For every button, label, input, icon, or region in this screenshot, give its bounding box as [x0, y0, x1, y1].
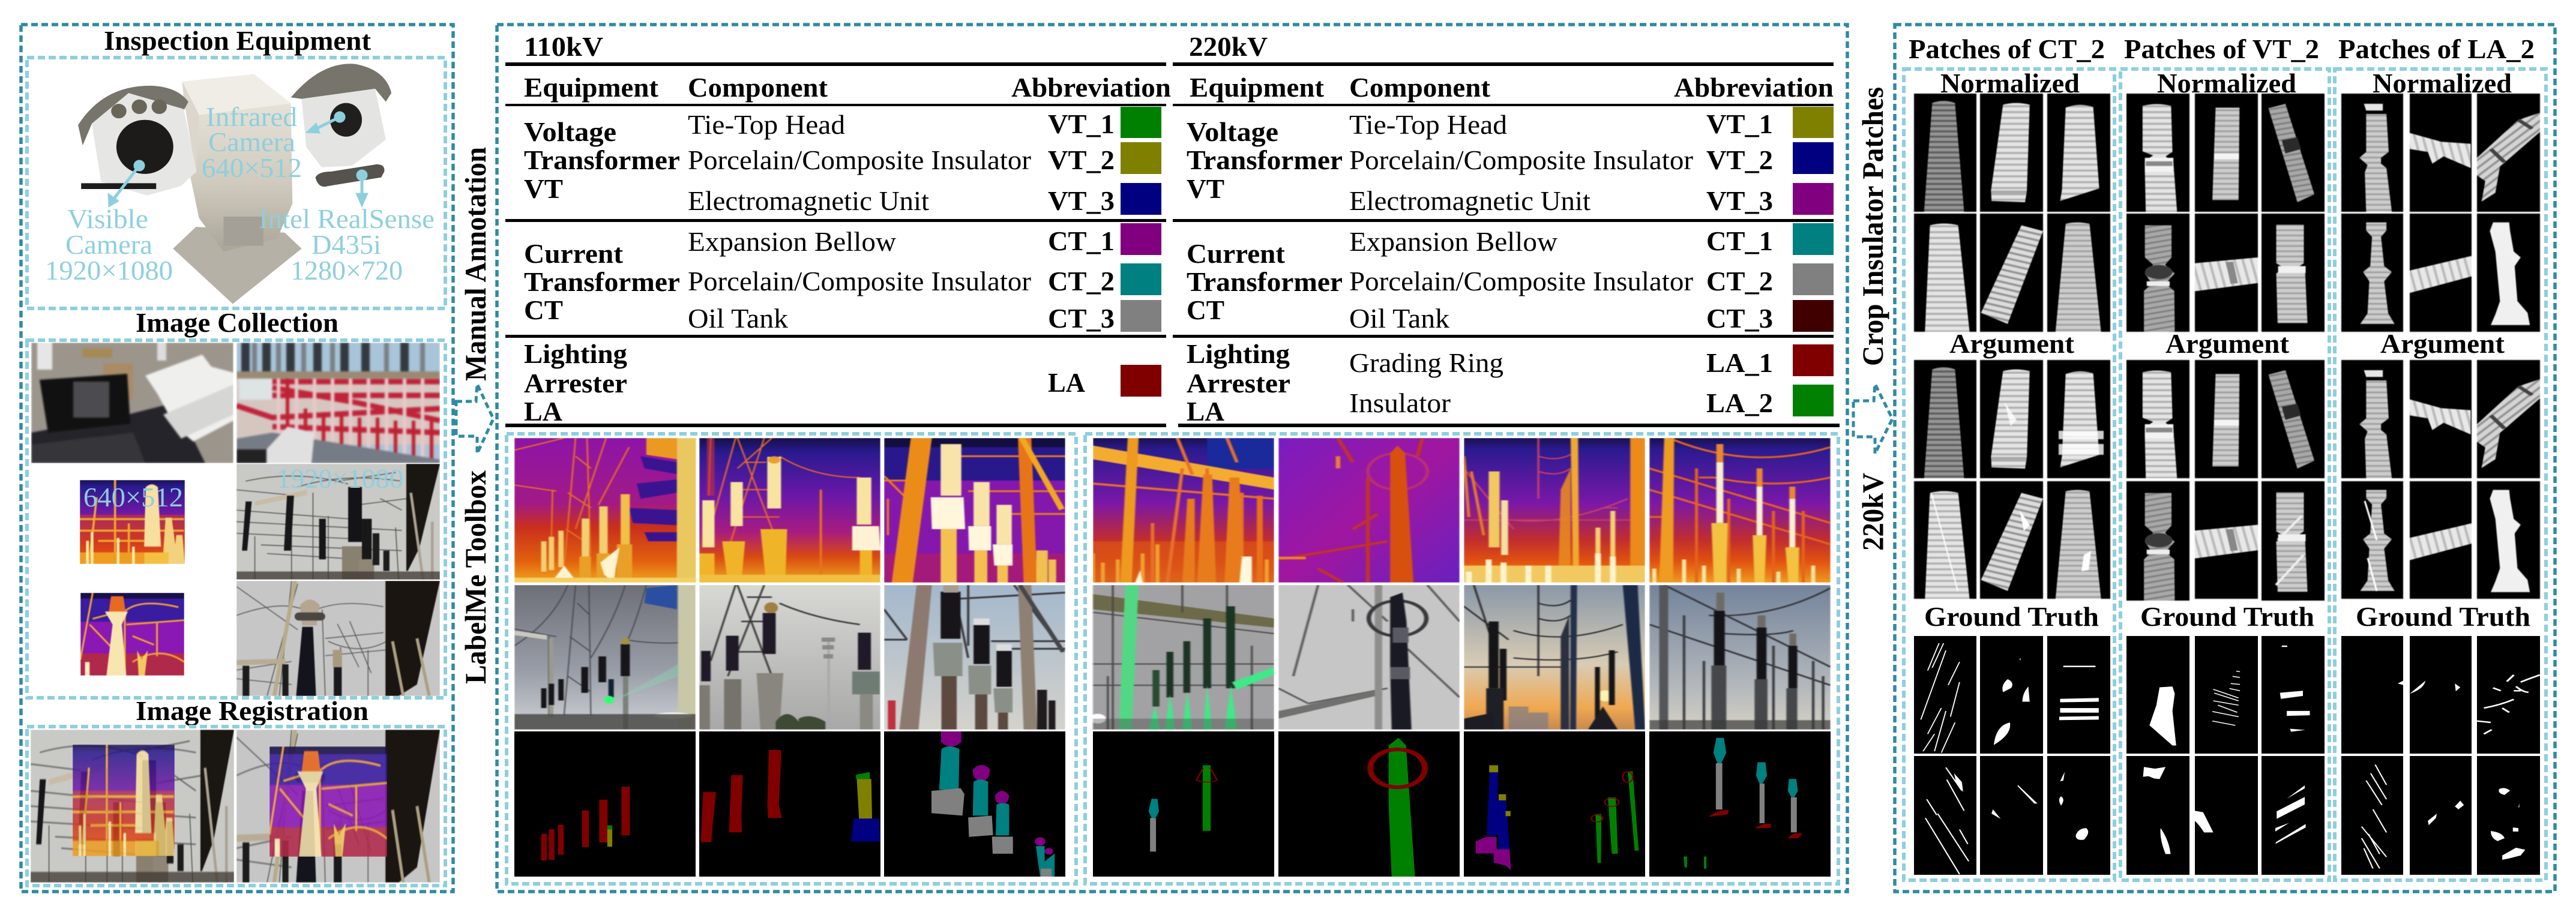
panel: 220kV image grid: [1085, 434, 1838, 884]
arrow: realsense pointer: [356, 170, 368, 207]
table: 220kV legend: Insulator: [1349, 388, 1451, 418]
label: Crop Insulator Patches: Crop Insulator Patches: [1856, 87, 1889, 366]
patches: CT_2 argument: [1914, 360, 2110, 599]
label: infrared camera: Camera: [208, 127, 295, 157]
patches: VT_2 ground truth: [2126, 636, 2325, 875]
panel: center manual annotation: [497, 25, 1847, 892]
label: Manual Annotation: Manual Annotation: [459, 147, 492, 381]
table: 220kV legend: Porcelain/Composite Insulator: [1349, 266, 1693, 296]
heading: Patches of VT_2: Patches of VT_2: [2124, 34, 2319, 64]
photo: thermal image 640x512: [80, 480, 185, 564]
table: 110kV legend: Transformer: [524, 145, 680, 175]
photo: 220kV thermal 1: [1093, 438, 1274, 583]
label: 220kV: 220kV: [1856, 473, 1889, 551]
panel: LA_2 patches: [2335, 68, 2546, 880]
table: 110kV legend: Tie-Top Head: [688, 109, 845, 140]
table: 220kV legend: Tie-Top Head: [1349, 109, 1507, 140]
photo: 220kV thermal 4: [1649, 438, 1831, 583]
table: 110kV legend: LA: [1048, 367, 1085, 398]
table: 110kV legend: [505, 31, 1171, 427]
table: 110kV legend: Abbreviation: [1011, 72, 1171, 103]
patches: VT_2 argument: [2126, 360, 2325, 601]
patches: LA_2 argument: [2341, 360, 2541, 599]
table: 220kV legend: VT: [1187, 173, 1224, 204]
table: 220kV legend: 220kV: [1189, 31, 1268, 62]
table: 220kV legend: Transformer: [1187, 266, 1343, 297]
panel: LA_2 patches: Argument: [2380, 328, 2505, 359]
panel: LA_2 patches: Ground Truth: [2356, 601, 2530, 632]
panel: VT_2 patches: [2120, 68, 2329, 880]
icon: pan tilt inspection camera: [78, 64, 391, 304]
label: intel realsense: D435i: [311, 229, 381, 260]
table: 110kV legend: VT_1: [1048, 109, 1115, 139]
arrow: infrared camera pointer: [306, 112, 345, 133]
table: 220kV legend: LA: [1187, 396, 1224, 427]
table: 220kV legend: CT: [1187, 295, 1224, 325]
table: 110kV legend: Transformer: [524, 266, 680, 297]
label: intel realsense: Intel RealSense: [259, 203, 435, 234]
table: 110kV legend: Equipment: [524, 72, 659, 103]
table: 220kV legend: Lighting: [1187, 338, 1290, 369]
panel: CT_2 patches: Argument: [1949, 328, 2075, 359]
photo: 110kV thermal 3: [884, 438, 1065, 583]
panel: camera rig: [27, 58, 445, 308]
photo: visible substation wide: [236, 464, 440, 580]
label: infrared camera: Infrared: [206, 101, 297, 132]
table: 220kV legend: VT_1: [1706, 109, 1773, 139]
photo: 110kV visible 3: [884, 585, 1065, 730]
heading: Patches of CT_2: Patches of CT_2: [1909, 34, 2105, 64]
table: 110kV legend: VT_3: [1048, 185, 1115, 216]
table: 220kV legend: Transformer: [1187, 145, 1343, 175]
label: visible resolution: 1920×1080: [277, 463, 403, 494]
patches: CT_2 normalized: [1914, 94, 2110, 332]
photo: visible substation close: [236, 581, 440, 696]
photo: 220kV mask 3: [1464, 731, 1645, 877]
table: 110kV legend: Oil Tank: [688, 303, 788, 334]
table: 220kV legend: VT_2: [1706, 145, 1773, 175]
table: 110kV legend: VT: [524, 173, 563, 204]
table: 110kV legend: Porcelain/Composite Insulator: [688, 266, 1031, 296]
label: intel realsense: [259, 203, 435, 286]
panel: VT_2 patches: Normalized: [2157, 68, 2296, 98]
table: 220kV legend: Grading Ring: [1349, 347, 1503, 378]
label: intel realsense: 1280×720: [290, 255, 403, 286]
table: 220kV legend: Oil Tank: [1349, 303, 1449, 334]
table: 220kV legend: Abbreviation: [1674, 72, 1834, 103]
photo: 220kV visible 3: [1464, 585, 1645, 730]
arrow: visible camera pointer: [108, 160, 145, 207]
photo: laptop and camera on site: [31, 343, 233, 463]
photo: 220kV visible 4: [1649, 585, 1831, 730]
table: 110kV legend: Voltage: [524, 116, 616, 147]
table: 110kV legend: Porcelain/Composite Insulator: [688, 145, 1031, 175]
photo: 220kV mask 2: [1278, 731, 1460, 877]
label: visible camera: [45, 203, 173, 286]
photo: thermal image close: [80, 593, 184, 676]
photo: 220kV visible 2: [1278, 585, 1460, 730]
label: LabelMe Toolbox: LabelMe Toolbox: [459, 470, 492, 684]
panel: right, crop insulator patches: [1895, 25, 2555, 892]
photo: 110kV thermal 2: [699, 438, 880, 583]
table: 110kV legend: Current: [524, 238, 624, 269]
patches: CT_2 ground truth: [1914, 636, 2110, 875]
heading: Image Collection: Image Collection: [136, 307, 339, 338]
table: 220kV legend: LA_2: [1706, 388, 1773, 418]
panel: CT_2 patches: Normalized: [1940, 68, 2080, 98]
table: 110kV legend: LA: [524, 396, 562, 427]
photo: registered overlay left: [31, 730, 234, 883]
photo: 110kV mask 1: [514, 731, 696, 877]
photo: 220kV thermal 3: [1464, 438, 1645, 583]
table: 220kV legend: Arrester: [1187, 368, 1290, 398]
table: 220kV legend: LA_1: [1706, 347, 1773, 378]
photo: 110kV visible 1: [514, 585, 696, 730]
photo: barrier at substation: [236, 343, 440, 463]
table: 220kV legend: Expansion Bellow: [1349, 226, 1558, 257]
heading: Patches of LA_2: Patches of LA_2: [2338, 34, 2535, 64]
table: 220kV legend: Electromagnetic Unit: [1349, 185, 1590, 216]
label: visible camera: Camera: [65, 229, 152, 260]
photo: 220kV mask 4: [1649, 731, 1831, 877]
heading: Inspection Equipment: Inspection Equipment: [104, 25, 372, 56]
photo: 220kV visible 1: [1092, 585, 1274, 730]
photo: 110kV visible 2: [699, 585, 880, 730]
panel: 110kV image grid: [507, 434, 1076, 884]
panel: left column, inspection equipment, collection and registration: [21, 25, 453, 892]
table: 110kV legend: CT: [524, 295, 563, 325]
panel: VT_2 patches: Ground Truth: [2140, 601, 2314, 632]
table: 220kV legend: Current: [1187, 238, 1286, 269]
patches: VT_2 normalized: [2126, 94, 2325, 332]
arrow: left panel to annotation panel: [456, 384, 493, 454]
patches: LA_2 ground truth: [2341, 636, 2540, 875]
table: 220kV legend: Voltage: [1187, 116, 1278, 147]
label: thermal resolution: 640×512: [83, 482, 183, 512]
label: infrared camera: [202, 101, 302, 183]
table: 110kV legend: Lighting: [524, 338, 627, 369]
table: 110kV legend: 110kV: [524, 31, 603, 62]
arrow: annotation panel to patches panel: [1853, 384, 1892, 454]
photo: registered overlay right: [236, 730, 440, 883]
table: 110kV legend: VT_2: [1048, 145, 1115, 175]
table: 110kV legend: CT_2: [1048, 266, 1115, 296]
table: 110kV legend: CT_1: [1048, 226, 1115, 256]
table: 110kV legend: Arrester: [524, 368, 627, 398]
photo: 220kV mask 1: [1093, 731, 1274, 877]
panel: CT_2 patches: Ground Truth: [1924, 601, 2099, 632]
table: 220kV legend: Component: [1349, 72, 1491, 103]
label: visible camera: 1920×1080: [45, 255, 173, 286]
photo: 110kV mask 2: [699, 731, 880, 877]
panel: image registration: [27, 727, 445, 886]
table: 220kV legend: Porcelain/Composite Insulator: [1349, 145, 1693, 175]
table: 220kV legend: CT_1: [1706, 226, 1773, 256]
label: infrared camera: 640×512: [202, 152, 302, 183]
photo: 110kV thermal 1: [514, 438, 696, 583]
photo: 110kV mask 3: [884, 731, 1065, 877]
panel: LA_2 patches: Normalized: [2373, 68, 2512, 98]
heading: Image Registration: Image Registration: [136, 695, 369, 726]
panel: VT_2 patches: Argument: [2165, 328, 2290, 359]
label: visible camera: Visible: [67, 203, 148, 234]
table: 220kV legend: VT_3: [1706, 185, 1773, 216]
table: 220kV legend: CT_3: [1706, 303, 1773, 334]
table: 220kV legend: [1173, 31, 1840, 427]
panel: CT_2 patches: [1904, 68, 2114, 880]
patches: LA_2 normalized: [2341, 94, 2541, 332]
table: 110kV legend: Electromagnetic Unit: [688, 185, 929, 216]
photo: 220kV thermal 2: [1278, 438, 1460, 583]
table: 220kV legend: Equipment: [1190, 72, 1325, 103]
table: 110kV legend: Expansion Bellow: [688, 226, 897, 257]
panel: image collection: [27, 340, 445, 698]
table: 110kV legend: CT_3: [1048, 303, 1115, 334]
table: 220kV legend: CT_2: [1706, 266, 1773, 296]
table: 110kV legend: Component: [688, 72, 828, 103]
